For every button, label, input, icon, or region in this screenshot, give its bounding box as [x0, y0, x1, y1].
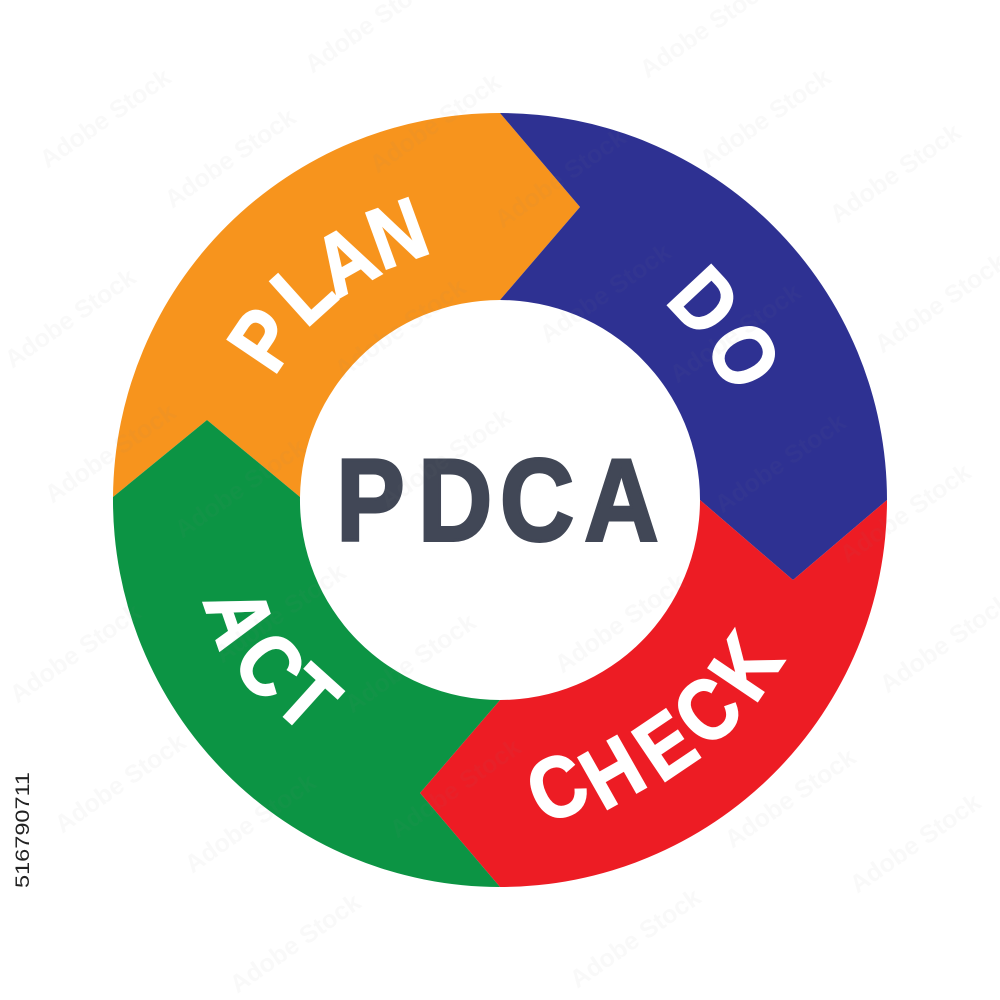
segment: check	[420, 500, 887, 887]
label: plan: L	[255, 241, 353, 343]
label: check: C	[656, 657, 760, 765]
watermark: Adobe Stock	[665, 278, 806, 389]
label: check: C	[513, 733, 602, 843]
watermark: Adobe Stock	[565, 883, 706, 994]
label: plan: A	[298, 206, 393, 316]
label: act: A	[185, 576, 293, 659]
watermark: Adobe Stock	[180, 768, 321, 879]
watermark: Adobe Stock	[340, 608, 481, 719]
watermark: Adobe Stock	[40, 398, 181, 509]
label: act: T	[258, 648, 356, 750]
watermark: Adobe Stock	[720, 743, 861, 854]
label: do	[650, 249, 799, 404]
watermark: Adobe Stock	[50, 728, 191, 839]
watermark: Adobe Stock	[845, 788, 986, 899]
label: act: C	[215, 614, 323, 718]
center title: PDCA	[336, 435, 659, 566]
watermark: Adobe Stock	[835, 458, 976, 569]
label: check: E	[618, 692, 713, 800]
label: check: H	[565, 718, 660, 828]
watermark: Adobe Stock	[375, 403, 516, 514]
watermark: Adobe Stock	[225, 888, 366, 999]
watermark: Adobe Stock	[5, 598, 146, 709]
watermark: Adobe Stock	[170, 433, 311, 544]
segment: plan	[113, 113, 580, 497]
watermark: Adobe Stock	[35, 63, 176, 174]
label: do: D	[650, 249, 758, 354]
label: plan: P	[210, 292, 318, 387]
watermark: Adobe Stock	[490, 123, 631, 234]
watermark: Adobe Stock	[160, 103, 301, 214]
label: plan: N	[355, 180, 439, 288]
label: plan	[210, 180, 439, 387]
segment: do	[500, 113, 887, 580]
watermark: Adobe Stock	[385, 733, 526, 844]
label: do: O	[687, 307, 799, 404]
watermark: Adobe Stock	[210, 558, 351, 669]
watermark: Adobe Stock	[0, 263, 141, 374]
watermark: Adobe Stock	[550, 568, 691, 679]
label: act	[185, 576, 356, 750]
watermark: Adobe Stock	[535, 238, 676, 349]
segment: act	[113, 420, 500, 887]
watermark: Adobe Stock	[330, 273, 471, 384]
stock image id: 516790711	[13, 772, 34, 888]
watermark: Adobe Stock	[825, 118, 966, 229]
watermark: Adobe Stock	[710, 408, 851, 519]
watermark: Adobe Stock	[695, 63, 836, 174]
label: check	[513, 617, 801, 843]
watermark: Adobe Stock	[365, 68, 506, 179]
label: check: K	[691, 617, 801, 716]
